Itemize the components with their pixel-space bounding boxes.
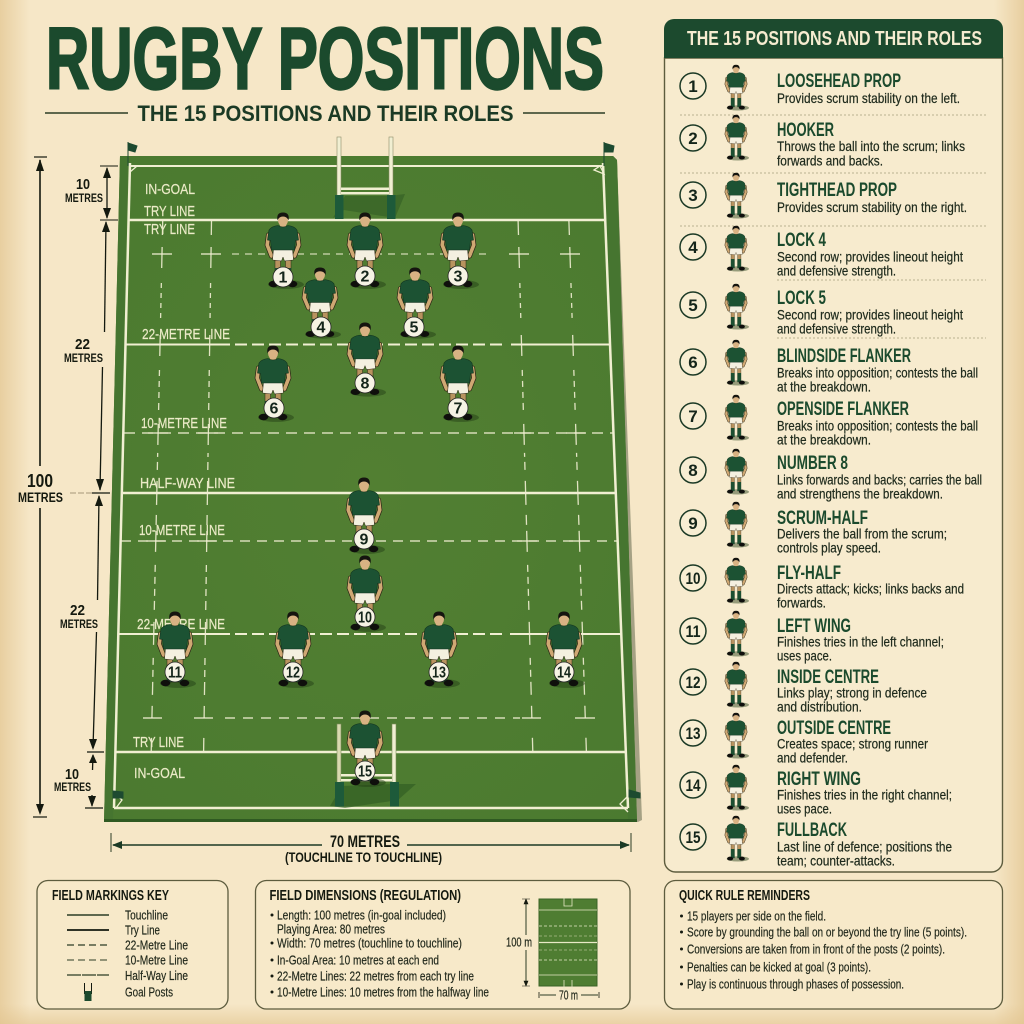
dimension: 70 metres (111, 833, 631, 865)
role 3 (680, 173, 967, 219)
field labels: HALF-WAY LINE (140, 476, 235, 492)
role 11 (680, 611, 944, 664)
role 11: 11 (686, 622, 700, 641)
dimension: upper 22 metres: 22 (75, 336, 90, 353)
player 6 (257, 346, 294, 422)
role 12: Links play; strong in defence (777, 684, 927, 700)
field labels: 22-METRE LINE (142, 327, 230, 343)
player 4 (304, 268, 341, 339)
rugby field (104, 137, 642, 822)
role 12: INSIDE CENTRE (777, 667, 879, 688)
role 10: Directs attack; kicks; links backs and (777, 580, 964, 596)
role 2: 2 (688, 129, 698, 148)
player 13 (423, 612, 460, 688)
player 5 (399, 268, 436, 339)
panel: field markings key (37, 880, 228, 1009)
role 7: 7 (688, 407, 698, 426)
dimension: upper 22 metres: METRES (64, 351, 103, 365)
role 4: LOCK 4 (777, 230, 826, 251)
role 4: Second row; provides lineout height (777, 248, 963, 264)
player 15: 15 (358, 764, 372, 780)
role 11: LEFT WING (777, 616, 851, 637)
player 12 (277, 612, 314, 688)
panel: quick rule reminders: QUICK RULE REMINDERS (679, 888, 810, 904)
mini field 70 m (539, 988, 599, 1002)
rule list: Penalties can be kicked at goal (3 points). (687, 960, 871, 974)
role 4: and defensive strength. (777, 262, 896, 278)
role 10 (680, 558, 964, 610)
panel header (664, 19, 1003, 58)
dimension: 100 metres: 100 (27, 471, 53, 491)
dimension: 100 metres (18, 157, 63, 817)
player 5: 5 (410, 320, 419, 336)
player 1: 1 (279, 270, 288, 286)
role 10: forwards. (777, 594, 826, 610)
role 14 (680, 765, 952, 816)
key: half-way line: Half-Way Line (125, 968, 188, 983)
dimension list: Width: 70 metres (touchline to touchline) (277, 936, 462, 950)
role 6: BLINDSIDE FLANKER (777, 346, 911, 367)
role 7: Breaks into opposition; contests the ball (777, 418, 978, 434)
dimension list: Playing Area: 80 metres (277, 922, 385, 936)
player 3 (442, 212, 479, 289)
role 5: LOCK 5 (777, 288, 826, 309)
key: 10-metre line (67, 952, 188, 968)
player 11 (159, 612, 196, 688)
field labels: TRY LINE (144, 204, 195, 220)
role 3: TIGHTHEAD PROP (777, 180, 897, 201)
role 9: SCRUM-HALF (777, 508, 868, 529)
dimension: lower 22 metres: METRES (60, 617, 98, 631)
dimension: top 10 metres (65, 166, 118, 220)
role 5: 5 (688, 296, 698, 315)
role 3: Provides scrum stability on the right. (777, 199, 967, 215)
role 14: uses pace. (777, 800, 832, 816)
role 3: 3 (688, 186, 698, 205)
role 12 (680, 662, 927, 714)
role 15: FULLBACK (777, 820, 847, 841)
role 15: Last line of defence; positions the (777, 838, 952, 854)
role 13: OUTSIDE CENTRE (777, 718, 891, 739)
field labels: TRY LINE (144, 222, 195, 238)
role 7: OPENSIDE FLANKER (777, 399, 909, 420)
role 1: LOOSEHEAD PROP (777, 71, 901, 92)
key: 22-metre line (67, 938, 188, 952)
dimension: 100 metres: METRES (18, 490, 63, 505)
mini field 100 m (506, 899, 532, 986)
role 11: Finishes tries in the left channel; (777, 634, 944, 650)
player 12: 12 (286, 664, 300, 682)
role 10: FLY-HALF (777, 563, 841, 584)
role 7: at the breakdown. (777, 432, 871, 448)
field labels: IN-GOAL (134, 766, 185, 782)
field lines (114, 163, 628, 812)
role 1: 1 (688, 77, 698, 96)
key: touchline: Touchline (125, 908, 168, 922)
role 9: controls play speed. (777, 540, 881, 556)
mini field 100 m: 100 m (506, 934, 532, 950)
role 6: Breaks into opposition; contests the ball (777, 364, 978, 380)
dimension: top 10 metres: 10 (76, 176, 90, 193)
player 6: 6 (270, 400, 279, 418)
dimension: bottom 10 metres (54, 754, 103, 808)
dimension: 70 metres: 70 METRES (330, 833, 400, 851)
key: try line (67, 922, 160, 938)
key: goal posts: Goal Posts (125, 984, 173, 1000)
dimension list: 22-Metre Lines: 22 metres from each try line (277, 968, 474, 984)
role 4: 4 (688, 238, 698, 257)
role 14: Finishes tries in the right channel; (777, 786, 952, 802)
player 8 (349, 323, 386, 397)
role 10: 10 (686, 569, 700, 588)
role 2 (680, 115, 965, 168)
player 14: 14 (557, 664, 571, 682)
player 10: 10 (358, 610, 372, 626)
field labels: IN-GOAL (145, 182, 195, 198)
role 13: 13 (686, 724, 700, 743)
corner flags (113, 142, 640, 798)
role 14: 14 (686, 776, 701, 795)
dimension list (270, 908, 489, 1000)
panel: field dimensions (256, 880, 630, 1009)
dimension: bottom 10 metres: 10 (65, 766, 79, 783)
role 15: 15 (686, 828, 700, 847)
panel: quick rule reminders (664, 880, 1002, 1009)
field labels: 22-METRE LINE (137, 617, 225, 633)
player 13: 13 (432, 664, 446, 682)
dimension list: Length: 100 metres (in-goal included) (277, 908, 446, 922)
dimension list: In-Goal Area: 10 metres at each end (277, 952, 439, 968)
key: touchline (67, 908, 168, 922)
role 13 (680, 713, 928, 766)
dimension: lower 22 metres (60, 495, 104, 752)
rule list: 15 players per side on the field. (687, 908, 826, 924)
player 3: 3 (454, 268, 463, 286)
dimension: bottom 10 metres: METRES (54, 780, 91, 794)
field labels (133, 182, 235, 782)
role 8: NUMBER 8 (777, 453, 848, 474)
role 6: 6 (688, 353, 698, 372)
field labels: 10-METRE LINE (139, 523, 225, 539)
goal posts bottom (330, 724, 416, 808)
role 15 (680, 816, 952, 868)
dimension list: 10-Metre Lines: 10 metres from the halfway line (277, 984, 489, 1000)
role 8: 8 (688, 461, 698, 480)
field labels: TRY LINE (133, 735, 184, 751)
role 5: Second row; provides lineout height (777, 306, 963, 322)
panel: field dimensions: FIELD DIMENSIONS (REGULATION) (270, 888, 461, 904)
role 8 (680, 449, 982, 502)
role 14: RIGHT WING (777, 769, 861, 790)
player 11: 11 (168, 664, 182, 682)
player 7: 7 (454, 400, 463, 418)
player 15 (349, 710, 386, 787)
role 8: and strengthens the breakdown. (777, 486, 943, 502)
key: try line: Try Line (125, 922, 160, 938)
title: RUGBY POSITIONS (46, 10, 604, 108)
key: goal posts (84, 983, 173, 1001)
role 9: Delivers the ball from the scrum; (777, 526, 947, 542)
rule list: Conversions are taken from in front of the posts (2 points). (687, 942, 945, 956)
mini field 70 m: 70 m (559, 988, 578, 1002)
role 5 (680, 284, 963, 336)
dimension: upper 22 metres (64, 221, 110, 493)
rule list (680, 908, 967, 992)
role 6 (680, 340, 978, 394)
role 2: Throws the ball into the scrum; links (777, 138, 965, 154)
player 9 (348, 478, 385, 554)
role 4 (680, 226, 963, 278)
player 1 (267, 212, 304, 289)
role 15: team; counter-attacks. (777, 852, 895, 868)
player 2 (349, 212, 386, 289)
key: 10-metre line: 10-Metre Line (125, 952, 188, 968)
role 1: Provides scrum stability on the left. (777, 90, 960, 106)
panel: the 15 positions (664, 19, 1003, 872)
dimension: 70 metres: (TOUCHLINE TO TOUCHLINE) (285, 850, 442, 865)
role 13: Creates space; strong runner (777, 736, 928, 752)
player 2: 2 (361, 268, 370, 286)
panel: field markings key: FIELD MARKINGS KEY (52, 888, 169, 904)
role 2: HOOKER (777, 120, 834, 141)
player 14 (548, 612, 585, 688)
key: half-way line (67, 968, 188, 983)
role 1 (680, 65, 960, 111)
rule list: Play is continuous through phases of possession. (687, 976, 904, 992)
role 13: and defender. (777, 750, 848, 766)
player 4: 4 (317, 320, 326, 336)
subtitle: THE 15 POSITIONS AND THEIR ROLES (138, 101, 514, 126)
role 12: 12 (686, 673, 700, 692)
player 7 (442, 346, 479, 422)
role 9 (680, 502, 947, 556)
role 2: forwards and backs. (777, 152, 883, 168)
role 9: 9 (688, 514, 698, 533)
dimension: top 10 metres: METRES (65, 191, 103, 205)
field labels: 10-METRE LINE (141, 416, 227, 432)
role 6: at the breakdown. (777, 378, 871, 394)
player 9: 9 (360, 532, 369, 548)
player 8: 8 (361, 376, 370, 392)
role 11: uses pace. (777, 648, 832, 664)
role 5: and defensive strength. (777, 320, 896, 336)
goal posts top (333, 137, 405, 219)
dimension: lower 22 metres: 22 (70, 602, 85, 619)
role 7 (680, 395, 978, 448)
player 10 (349, 556, 386, 632)
key: 22-metre line: 22-Metre Line (125, 938, 188, 952)
mini field diagram (539, 895, 597, 990)
role 12: and distribution. (777, 698, 862, 714)
